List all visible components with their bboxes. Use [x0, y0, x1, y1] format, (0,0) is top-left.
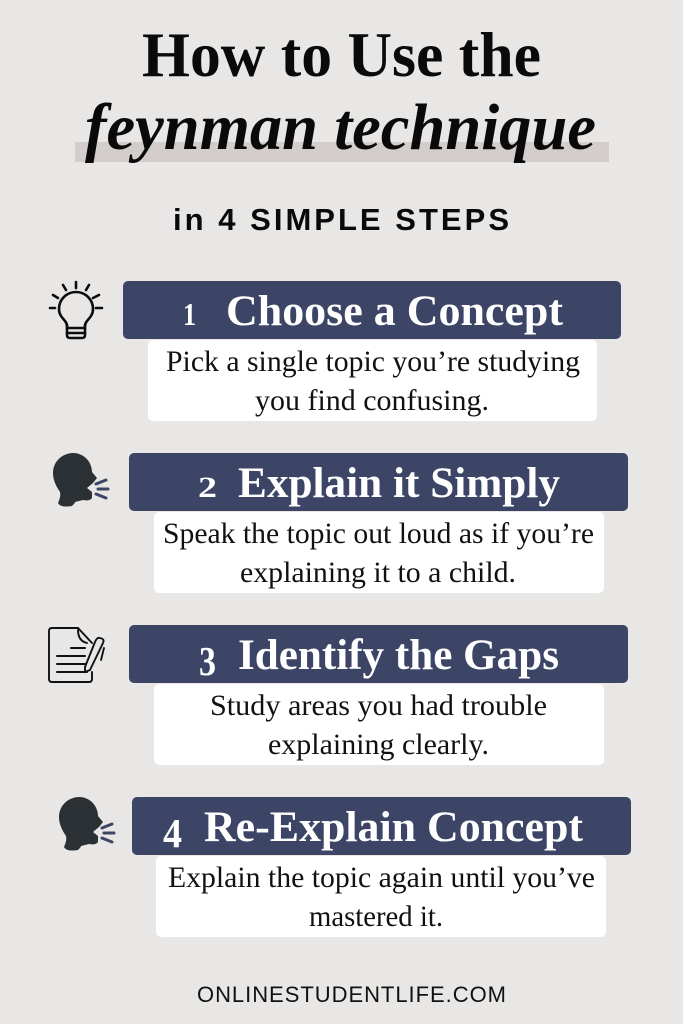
- step 4 heading text: Re-Explain Concept: [204, 804, 584, 851]
- step 1: [50, 281, 621, 421]
- title highlight bar: [75, 142, 609, 162]
- step 3 header bar: [129, 625, 628, 683]
- step 4 header bar: [132, 797, 631, 855]
- step 1 number: 1: [183, 296, 196, 332]
- icon: speaking head: [59, 797, 114, 851]
- step 2 header bar: [129, 453, 628, 511]
- step 4 body line 2: mastered it.: [309, 901, 443, 933]
- step 3 body line 1: Study areas you had trouble: [210, 690, 547, 722]
- subtitle: in 4 SIMPLE STEPS: [173, 202, 509, 237]
- step 3 heading text: Identify the Gaps: [238, 632, 559, 679]
- icon: document and pen: [49, 628, 104, 682]
- step 2 heading text: Explain it Simply: [238, 460, 560, 507]
- step 1 body line 1: Pick a single topic you’re studying: [166, 346, 580, 378]
- title line 1: How to Use the: [142, 20, 541, 90]
- step 3: [49, 625, 628, 765]
- footer url: ONLINESTUDENTLIFE.COM: [197, 982, 506, 1007]
- step 1 heading text: Choose a Concept: [226, 288, 564, 335]
- step 3 body line 2: explaining clearly.: [268, 729, 489, 761]
- step 1 header bar: [123, 281, 621, 339]
- step 4 body line 1: Explain the topic again until you’ve: [168, 862, 595, 894]
- title line 2: feynman technique: [85, 91, 596, 164]
- step 3 body panel: [154, 684, 604, 765]
- icon: light bulb: [50, 282, 102, 338]
- step 2: [53, 453, 628, 593]
- step 3 number: 3: [199, 638, 216, 684]
- step 2 number: 2: [198, 471, 217, 504]
- step 2 body line 1: Speak the topic out loud as if you’re: [163, 518, 594, 550]
- step 2 body line 2: explaining it to a child.: [240, 557, 516, 589]
- step 4 body panel: [156, 856, 606, 937]
- step 2 body panel: [154, 512, 604, 593]
- step 4 number: 4: [163, 810, 182, 856]
- icon: speaking head: [53, 453, 108, 507]
- step 4: [59, 797, 631, 937]
- step 1 body panel: [148, 340, 597, 421]
- step 1 body line 2: you find confusing.: [255, 385, 489, 417]
